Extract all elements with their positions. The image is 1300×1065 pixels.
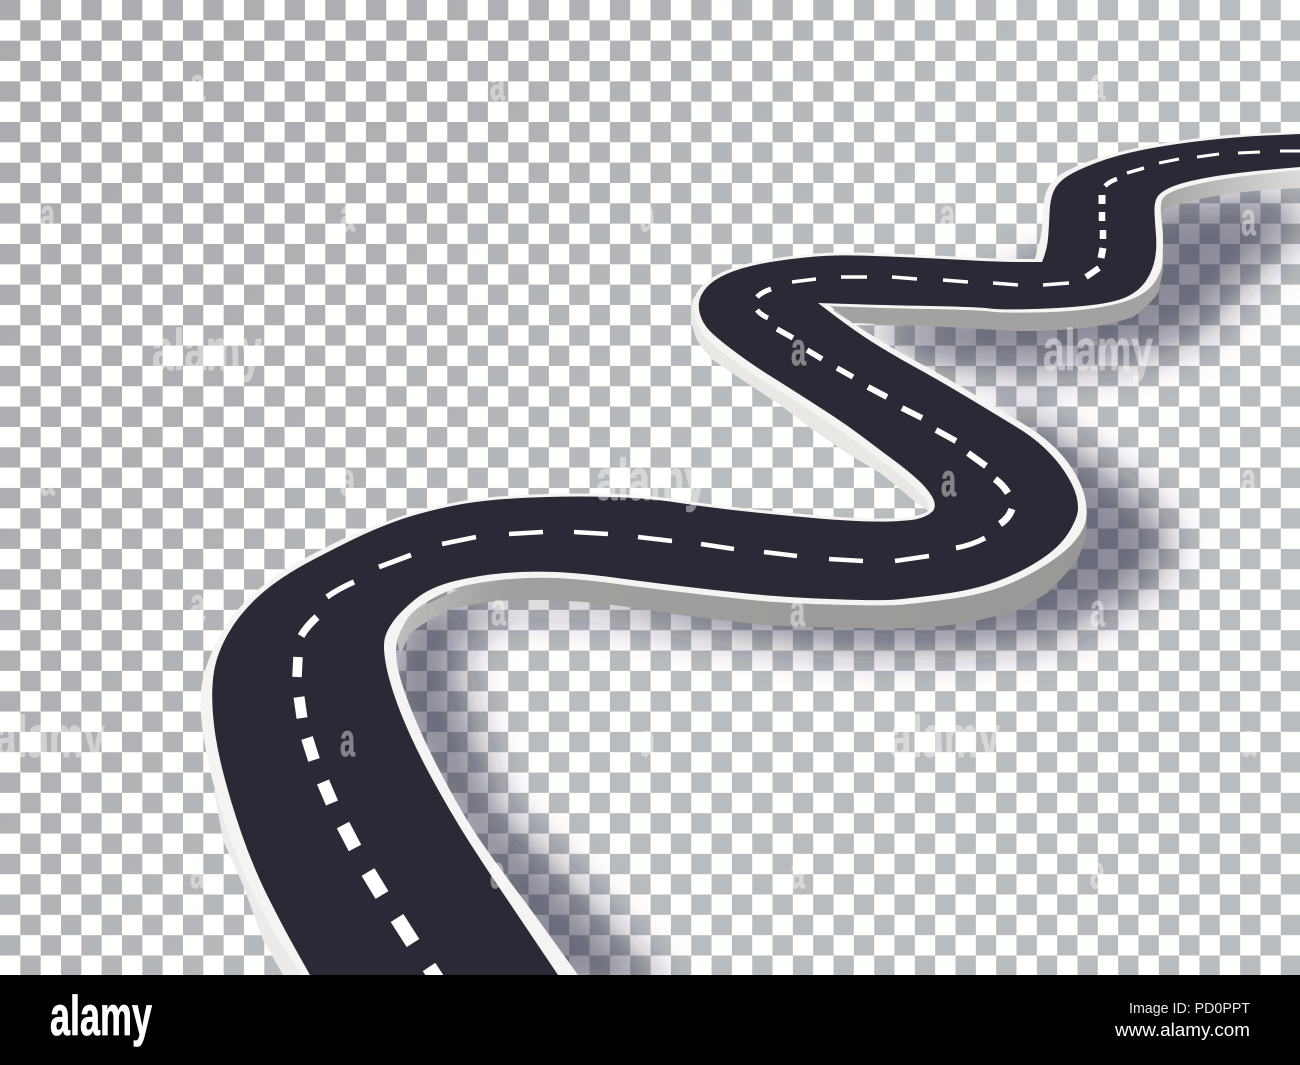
bottom left light wall (214, 790, 302, 975)
stock watermarks: a (941, 454, 956, 506)
road (200, 132, 1300, 985)
stock watermarks: a (1090, 584, 1105, 636)
stock watermarks: a (40, 453, 55, 505)
stock watermarks: a (340, 189, 355, 241)
stock watermarks: a (491, 583, 506, 635)
stock watermarks: a (190, 578, 205, 630)
stock watermarks: a (940, 189, 955, 241)
stock watermarks: a (190, 58, 205, 110)
stock watermarks: a (1090, 846, 1105, 898)
stock watermarks: a (1241, 453, 1256, 505)
road drop shadow (380, 195, 1300, 995)
stock watermarks: a (490, 58, 505, 110)
stock watermarks: alamy (596, 448, 706, 513)
stock watermarks: a (490, 846, 505, 898)
image id: Image ID: PD0PPT (1129, 1000, 1250, 1017)
middle section side wall (826, 250, 1163, 331)
stock watermarks: a (640, 189, 655, 241)
website: www.alamy.com (1114, 1020, 1250, 1040)
stock watermarks: a (340, 714, 355, 766)
diagonal section light wall (692, 290, 940, 510)
stock watermarks: a (190, 846, 205, 898)
footer bar (0, 975, 1300, 1065)
stock watermarks: a (790, 846, 805, 898)
far section side wall (1160, 170, 1300, 213)
stock watermarks: alamy (152, 318, 262, 383)
dashed centre line: near section (297, 430, 1012, 985)
road white rim (200, 132, 1300, 975)
stock watermarks: alamy (1043, 318, 1153, 383)
stock watermarks: a (40, 189, 55, 241)
footer logo: alamy (50, 984, 152, 1047)
stock watermarks: a (340, 453, 355, 505)
stock watermarks: alamy (890, 705, 1000, 770)
dashed centre line: middle section (757, 277, 1069, 418)
stock watermarks: a (1090, 58, 1105, 110)
dashed centre line: far section (1086, 151, 1300, 277)
stock watermarks: a (1241, 714, 1256, 766)
road asphalt surface (212, 134, 1300, 975)
stock watermarks (0, 58, 1256, 898)
stock watermarks: a (790, 584, 805, 636)
stock watermarks: a (640, 714, 655, 766)
near section side wall (393, 510, 1087, 655)
stock watermarks: a (791, 323, 806, 375)
stock watermarks: a (1241, 193, 1256, 245)
